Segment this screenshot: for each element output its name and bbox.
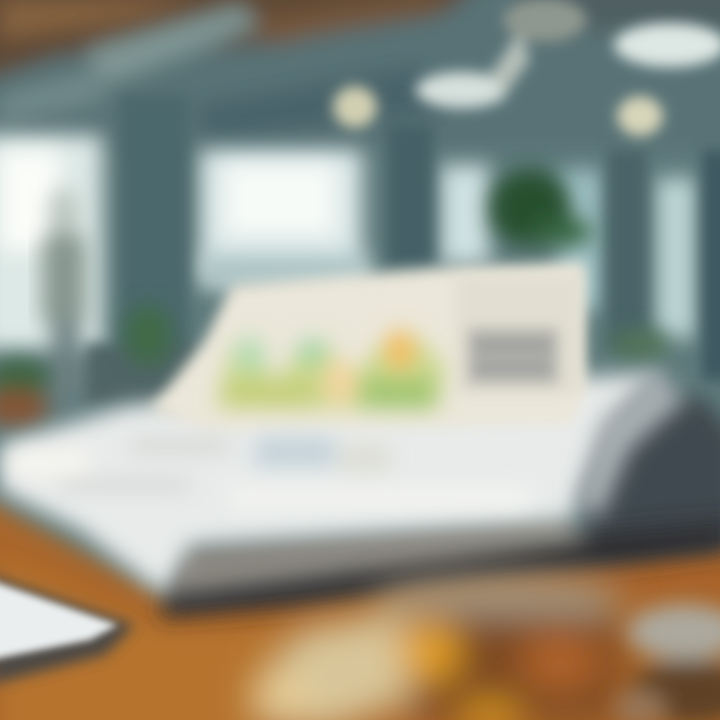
bar chart	[215, 330, 445, 410]
text smudges	[10, 438, 530, 506]
book side pages	[172, 515, 590, 596]
foreground cups and plates	[250, 576, 625, 720]
ceiling	[0, 0, 720, 150]
table graphic	[468, 328, 558, 384]
plants	[0, 170, 670, 426]
upper sheet	[150, 262, 585, 430]
curled right page	[575, 368, 685, 520]
open book pages	[0, 375, 660, 595]
table	[0, 490, 720, 720]
windows	[0, 135, 696, 350]
report document	[0, 262, 720, 618]
dark right object	[580, 395, 720, 550]
ceiling lights	[333, 0, 720, 136]
window highlights	[0, 150, 370, 290]
statue figure	[42, 188, 86, 400]
sheet right panel	[455, 275, 580, 395]
foreground bowl	[614, 604, 720, 720]
columns	[85, 95, 720, 405]
book shadow	[160, 520, 720, 618]
laptop corner	[0, 575, 135, 685]
